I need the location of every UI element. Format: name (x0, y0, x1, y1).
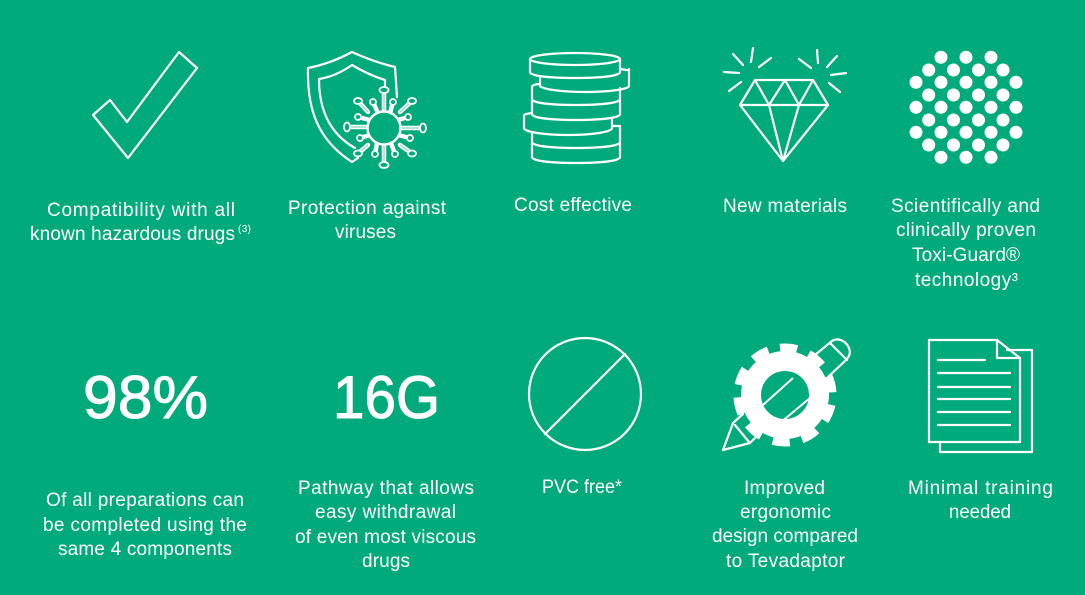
big number: 16G: 16G (333, 364, 440, 431)
label: compatibility text: (3) (238, 224, 251, 235)
label: ergonomic design text: Improved (744, 478, 825, 499)
label: ergonomic design text (712, 478, 858, 572)
label: PVC free text: PVC free* (542, 477, 623, 498)
label: pathway text: easy withdrawal (315, 502, 456, 523)
label: pathway text (295, 478, 476, 572)
label: minimal training text (908, 478, 1053, 523)
panel: new materials (723, 48, 847, 217)
panel: cost effective (514, 53, 632, 216)
label: virus protection text (288, 198, 447, 243)
label: compatibility text: Compatibility with all (47, 200, 235, 221)
label: virus protection text: Protection against (288, 198, 447, 219)
label: compatibility text: known hazardous drugs (30, 224, 235, 245)
icon: dot cluster (910, 51, 1022, 164)
label: ergonomic design text: to Tevadaptor (726, 551, 846, 572)
label: new materials text: New materials (723, 196, 847, 217)
icon: shield with virus (308, 52, 426, 168)
icon: check mark (93, 52, 197, 158)
label: pathway text: Pathway that allows (298, 478, 474, 499)
panel: compatibility (30, 52, 251, 245)
label: Toxi-Guard text: Toxi-Guard® (912, 245, 1020, 266)
panel: 98 percent statistic (43, 364, 247, 560)
label: ergonomic design text: ergonomic (740, 502, 831, 523)
label: cost effective text: Cost effective (514, 195, 632, 216)
icon: sparkling diamond (724, 48, 846, 161)
label: Toxi-Guard text (891, 196, 1040, 291)
label: virus protection text: viruses (335, 222, 396, 243)
label: minimal training text: needed (949, 502, 1011, 523)
label: ergonomic design text: design compared (712, 526, 858, 547)
label: preparations text: Of all preparations can (46, 490, 244, 511)
label: preparations text: be completed using the (43, 515, 247, 536)
label: pathway text: of even most viscous (295, 527, 476, 548)
label: Toxi-Guard text: technology³ (915, 270, 1018, 291)
label: pathway text: drugs (362, 551, 410, 572)
icon: gear with pencil (723, 339, 850, 450)
label: Toxi-Guard text: clinically proven (896, 220, 1036, 241)
panel: virus protection (288, 52, 447, 243)
panel: PVC free (529, 338, 641, 498)
label: minimal training text: Minimal training (908, 478, 1053, 499)
big number: 98%: 98% (83, 364, 208, 431)
panel: minimal training (908, 340, 1053, 523)
icon: stacked documents (929, 340, 1032, 452)
label: preparations text (43, 490, 247, 560)
panel: Toxi-Guard technology (891, 51, 1040, 291)
label: preparations text: same 4 components (58, 539, 232, 560)
panel: ergonomic design (712, 339, 858, 572)
label: Toxi-Guard text: Scientifically and (891, 196, 1040, 217)
icon: prohibition circle (529, 338, 641, 450)
icon: stack of coins (524, 53, 629, 163)
label: compatibility text (30, 200, 251, 245)
panel: 16G pathway (295, 364, 476, 572)
